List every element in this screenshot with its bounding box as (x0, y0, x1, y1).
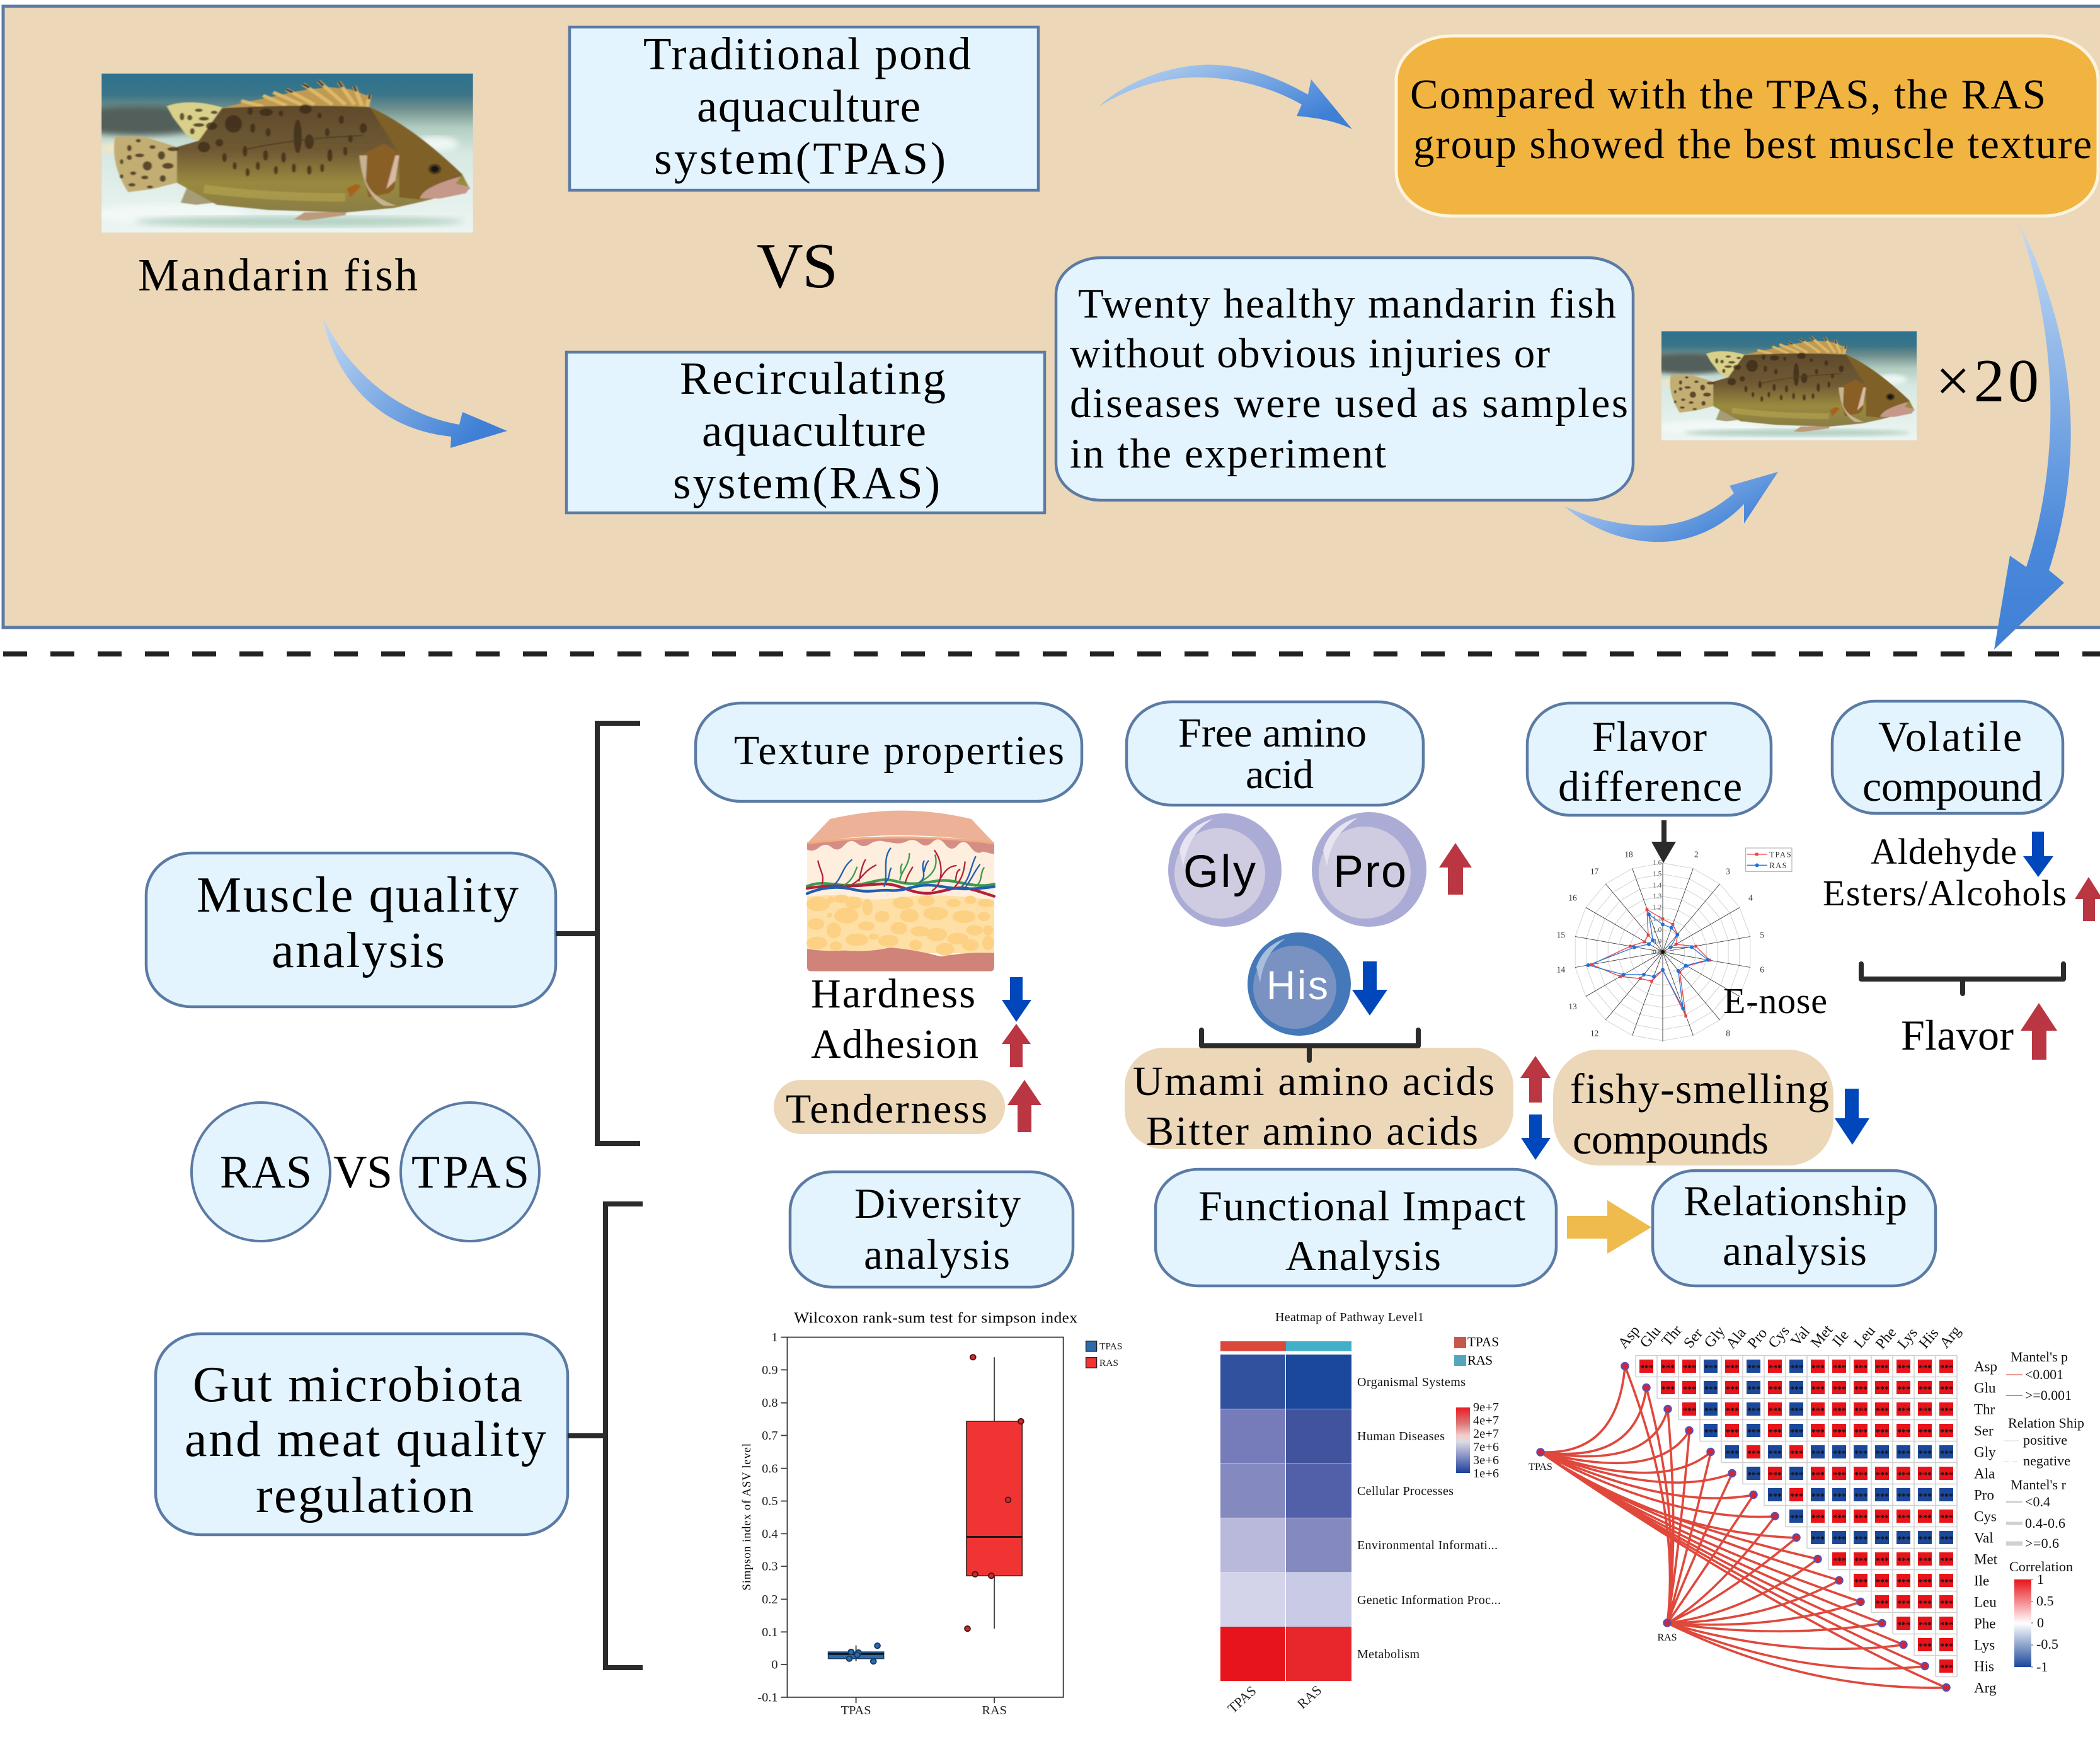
matrix: column labels: Leu (1851, 1323, 1879, 1351)
radar chart: E-nose: TPAS (1769, 851, 1791, 859)
chart: Wilcoxon box plot of simpson index: 0.1 (762, 1625, 778, 1639)
box: twenty healthy mandarin fish: in the experiment (1070, 430, 1386, 477)
box: flavor difference: difference (1558, 762, 1742, 810)
arrow: mandarin fish to RAS (323, 318, 507, 448)
chart: heatmap of pathway level 1: 7e+6 (1473, 1440, 1499, 1454)
label: times twenty: ×20 (1936, 347, 2039, 415)
matrix: column labels: Glu (1637, 1323, 1664, 1351)
matrix: significance stars: *** *** *** *** *** *** *** *** *** *** *** *** *** (1683, 1406, 1953, 1416)
matrix: significance stars: *** *** *** *** *** *** *** *** (1790, 1513, 1953, 1523)
matrix: row labels: Phe (1974, 1615, 1996, 1632)
label: RAS node: RAS (1657, 1632, 1677, 1643)
chart: heatmap of pathway level 1: Metabolism (1357, 1647, 1420, 1661)
radar chart: E-nose: 18 (1624, 849, 1633, 859)
arrow: aldehyde down (2023, 832, 2053, 877)
text: Aldehyde: Aldehyde (1871, 831, 2017, 872)
matrix: significance stars (1640, 1363, 1953, 1673)
chart: heatmap of pathway level 1: Human Diseases (1357, 1430, 1445, 1443)
text: Esters/Alcohols: Esters/Alcohols (1823, 873, 2067, 914)
matrix: column labels: His (1916, 1325, 1942, 1352)
legend: Mantel p, relationship and Mantel r (2004, 1349, 2084, 1551)
box: recirculating aquaculture system (566, 352, 1045, 513)
chart: Wilcoxon box plot of simpson index: 0.6 (762, 1462, 778, 1475)
matrix: red cells (1639, 1366, 1953, 1666)
matrix: column labels: Pro (1745, 1325, 1770, 1352)
legend: correlation colour bar: -1 (2036, 1659, 2048, 1675)
comparison: RAS VS TPAS circles (192, 1103, 539, 1241)
radar chart: E-nose: 0.9 (1653, 937, 1662, 945)
chart: heatmap of pathway level 1: Genetic Information Proc... (1357, 1593, 1501, 1607)
radar chart: E-nose: 0.8 (1653, 949, 1662, 956)
network: TPAS and RAS links (1541, 1367, 1946, 1688)
photo: mandarin fish (62, 74, 473, 232)
legend: correlation colour bar (2009, 1559, 2073, 1675)
matrix: column labels: Arg (1937, 1323, 1964, 1351)
arrow: Gly Pro up (1439, 843, 1472, 895)
matrix: row labels: Arg (1974, 1680, 1997, 1696)
sphere: His (1248, 932, 1351, 1036)
label: Mandarin fish: Mandarin fish (138, 249, 418, 301)
matrix: significance stars: *** *** *** *** *** *** *** *** *** *** *** *** *** *** (1661, 1385, 1953, 1395)
box: volatile compound (1832, 701, 2063, 813)
network: nodes (1537, 1363, 1949, 1691)
radar chart: E-nose: 13 (1568, 1002, 1577, 1011)
box: functional impact analysis (1156, 1169, 1556, 1286)
box: diversity analysis: Diversity (854, 1179, 1021, 1227)
radar chart: E-nose (1557, 848, 1792, 1041)
legend: Mantel p, relationship and Mantel r: >=0.001 (2025, 1387, 2072, 1403)
box: flavor difference (1527, 703, 1771, 815)
radar chart: E-nose: 15 (1557, 931, 1565, 940)
box: diversity analysis (790, 1172, 1073, 1287)
comparison: RAS VS TPAS circles: TPAS (411, 1147, 529, 1198)
comparison: RAS VS TPAS circles: VS (333, 1147, 393, 1198)
matrix: column labels: Thr (1659, 1322, 1685, 1349)
radar chart: E-nose: 2 (1694, 849, 1699, 859)
chart: heatmap of pathway level 1: RAS (1467, 1353, 1493, 1368)
box: functional impact analysis: Analysis (1285, 1232, 1441, 1280)
sphere: Pro (1312, 812, 1426, 927)
callout: conclusion box: Compared with the TPAS, the RAS (1410, 71, 2046, 118)
chart: heatmap of pathway level 1: RAS (1294, 1682, 1324, 1712)
chart: heatmap of pathway level 1: Organismal Systems (1357, 1375, 1466, 1389)
box: twenty healthy mandarin fish (1056, 258, 1633, 500)
chart: Wilcoxon box plot of simpson index: RAS (982, 1704, 1007, 1717)
box: texture properties (696, 703, 1082, 801)
bracket: gut microbiota branches (568, 1204, 643, 1668)
legend: correlation colour bar: 1 (2037, 1571, 2044, 1587)
legend: correlation colour bar: -0.5 (2036, 1636, 2058, 1652)
radar chart: E-nose: 12 (1590, 1028, 1598, 1038)
box: traditional pond aquaculture system: aquaculture (697, 81, 921, 132)
matrix: column labels: Lys (1895, 1325, 1921, 1352)
text: Hardness: Hardness (811, 971, 975, 1017)
radar chart: E-nose: RAS (1769, 861, 1787, 870)
matrix: row labels: Thr (1974, 1401, 1995, 1418)
radar chart: E-nose: 3 (1726, 867, 1730, 876)
legend: Mantel p, relationship and Mantel r: Mantel's r (2011, 1477, 2067, 1493)
arrow: esters up (2075, 877, 2100, 921)
box: twenty healthy mandarin fish: without obvious injuries or (1070, 330, 1550, 377)
matrix: row labels: Pro (1974, 1487, 1994, 1503)
box: traditional pond aquaculture system (570, 27, 1038, 190)
box: relationship analysis: Relationship (1684, 1177, 1907, 1225)
chart: Wilcoxon box plot of simpson index: RAS (1099, 1358, 1118, 1368)
chart: Wilcoxon box plot of simpson index: Simpson index of ASV level (740, 1443, 754, 1590)
legend: Mantel p, relationship and Mantel r: <0.001 (2025, 1367, 2063, 1382)
legend: correlation colour bar: 0 (2037, 1615, 2044, 1630)
legend: Mantel p, relationship and Mantel r: Relation Ship (2008, 1415, 2084, 1431)
box: free amino acid: Free amino (1178, 710, 1367, 756)
matrix: significance stars: *** *** *** *** *** *** *** (1811, 1535, 1953, 1545)
chart: heatmap of pathway level 1: 4e+7 (1473, 1414, 1499, 1428)
panel: top study design background (3, 6, 2100, 627)
pill: umami and bitter amino acids (1125, 1048, 1513, 1154)
matrix: column labels: Asp (1615, 1322, 1643, 1352)
box: texture properties: Texture properties (734, 728, 1064, 774)
chart: Wilcoxon box plot of simpson index: 0.3 (762, 1560, 778, 1574)
divider: dashed line (3, 651, 2100, 656)
bracket: flavor (1861, 964, 2063, 994)
matrix: column labels: Ile (1830, 1327, 1852, 1350)
callout: conclusion box: group showed the best muscle texture (1413, 121, 2092, 168)
chart: heatmap of pathway level 1: 1e+6 (1473, 1467, 1499, 1481)
box: gut microbiota and meat quality regulation (156, 1334, 568, 1535)
box: twenty healthy mandarin fish: Twenty healthy mandarin fish (1078, 280, 1616, 327)
box: relationship analysis: analysis (1723, 1227, 1867, 1275)
chart: Mantel correlation matrix (1529, 1322, 2084, 1696)
chart: heatmap of pathway level 1: 9e+7 (1473, 1401, 1499, 1414)
legend: correlation colour bar: 0.5 (2036, 1593, 2054, 1609)
callout: conclusion box (1396, 36, 2098, 216)
legend: Mantel p, relationship and Mantel r: Mantel's p (2011, 1349, 2068, 1365)
chart: Wilcoxon box plot of simpson index: 0.7 (762, 1429, 778, 1443)
matrix: significance stars: *** *** *** *** *** *** *** *** *** *** *** (1726, 1449, 1953, 1459)
comparison: RAS VS TPAS circles: RAS (220, 1147, 312, 1198)
radar chart: E-nose: 6 (1760, 965, 1764, 974)
chart: heatmap of pathway level 1: Heatmap of Pathway Level1 (1275, 1310, 1424, 1324)
matrix: column labels: Phe (1873, 1324, 1900, 1353)
chart: Wilcoxon box plot of simpson index: 0.2 (762, 1593, 778, 1607)
radar chart: E-nose: 1.2 (1653, 904, 1662, 912)
chart: heatmap of pathway level 1: 2e+7 (1473, 1427, 1499, 1441)
sphere: Pro: Pro (1333, 847, 1406, 897)
matrix: grid cells (1636, 1356, 1957, 1677)
arrow: TPAS to conclusion (1099, 65, 1352, 129)
radar chart: E-nose: 5 (1760, 931, 1764, 940)
legend: correlation colour bar: Correlation (2009, 1559, 2073, 1574)
matrix: significance stars: *** *** *** *** (1876, 1599, 1953, 1609)
box: gut microbiota and meat quality regulation: and meat quality (185, 1412, 546, 1467)
arrow: big curved arrow down to analysis (1994, 224, 2071, 650)
box: volatile compound: compound (1862, 762, 2043, 810)
arrow: fishy compounds down (1835, 1089, 1869, 1145)
pill: fishy-smelling compounds: compounds (1573, 1115, 1769, 1163)
matrix: significance stars: *** *** *** *** *** *** *** *** *** *** (1747, 1470, 1953, 1481)
box: free amino acid (1127, 702, 1423, 805)
matrix: significance stars: *** (1940, 1663, 1953, 1673)
text: E-nose: E-nose (1723, 980, 1827, 1021)
heading: VS: VS (757, 231, 838, 302)
box: free amino acid: acid (1246, 752, 1314, 798)
box: diversity analysis: analysis (864, 1230, 1010, 1278)
matrix: significance stars: *** *** *** *** *** *** (1833, 1556, 1953, 1566)
radar chart: E-nose: 17 (1590, 867, 1599, 876)
illustration: skin and muscle tissue cross-section (806, 811, 994, 971)
matrix: row labels: Gly (1974, 1444, 1996, 1460)
box: muscle quality analysis: Muscle quality (197, 868, 519, 923)
box: flavor difference: Flavor (1592, 713, 1707, 760)
matrix: row labels: Ile (1974, 1573, 1989, 1589)
radar chart: E-nose: 1.4 (1653, 881, 1662, 889)
matrix: row labels: Met (1974, 1551, 1998, 1567)
radar chart: E-nose: 1.0 (1653, 926, 1662, 934)
radar chart: E-nose: 1.3 (1653, 893, 1662, 900)
legend: Mantel p, relationship and Mantel r: negative (2023, 1453, 2070, 1469)
pill: fishy-smelling compounds (1553, 1050, 1833, 1166)
box: gut microbiota and meat quality regulation: regulation (256, 1468, 474, 1523)
pill: umami and bitter amino acids: Bitter amino acids (1146, 1108, 1478, 1154)
matrix: row labels: Lys (1974, 1637, 1995, 1653)
arrow: His down (1352, 961, 1387, 1016)
arrow: samples to fish (1564, 472, 1778, 542)
box: recirculating aquaculture system: system(RAS) (673, 457, 940, 508)
arrow: bitter down (1521, 1114, 1551, 1160)
box: recirculating aquaculture system: aquaculture (702, 405, 926, 456)
radar chart: E-nose: 1.5 (1653, 871, 1662, 878)
matrix: significance stars: *** *** *** *** *** *** *** *** *** (1769, 1492, 1953, 1502)
matrix: column labels: Ala (1723, 1325, 1750, 1352)
matrix: row labels (1974, 1358, 1998, 1696)
radar chart: E-nose: 1.1 (1653, 915, 1661, 923)
matrix: blue cells (1704, 1366, 1953, 1537)
arrow: black flavor difference (1651, 820, 1676, 863)
matrix: significance stars: *** *** (1919, 1642, 1953, 1652)
matrix: column labels: Met (1808, 1322, 1836, 1351)
box: recirculating aquaculture system: Recirculating (680, 353, 946, 404)
chart: heatmap of pathway level 1 (1220, 1310, 1501, 1716)
box: muscle quality analysis: analysis (272, 923, 445, 978)
photo: sample fish (1634, 331, 1917, 440)
pill: umami and bitter amino acids: Umami amino acids (1133, 1058, 1495, 1104)
chart: Wilcoxon box plot of simpson index (740, 1310, 1122, 1717)
sphere: His: His (1266, 963, 1328, 1008)
legend: Mantel p, relationship and Mantel r: >=0.6 (2025, 1535, 2059, 1551)
arrow: umami up (1520, 1056, 1551, 1103)
chart: Wilcoxon box plot of simpson index: Wilcoxon rank-sum test for simpson index (794, 1310, 1078, 1327)
text: Flavor: Flavor (1901, 1011, 2014, 1059)
box: functional impact analysis: Functional Impact (1198, 1182, 1525, 1230)
matrix: row labels: His (1974, 1658, 1994, 1675)
chart: Wilcoxon box plot of simpson index: 0.5 (762, 1494, 778, 1508)
arrow: functional to relationship (1567, 1200, 1651, 1254)
box: gut microbiota and meat quality regulation: Gut microbiota (193, 1357, 522, 1412)
matrix: significance stars: *** *** *** *** *** *** *** *** *** *** *** *** *** *** *** (1640, 1363, 1953, 1373)
matrix: row labels: Cys (1974, 1508, 1997, 1525)
pill: fishy-smelling compounds: fishy-smelling (1570, 1065, 1829, 1113)
matrix: column labels: Gly (1701, 1323, 1728, 1351)
matrix: row labels: Leu (1974, 1594, 1997, 1610)
box: muscle quality analysis (146, 853, 556, 1007)
pill: Tenderness: Tenderness (786, 1086, 987, 1132)
matrix: row labels: Ala (1974, 1465, 1995, 1482)
chart: Wilcoxon box plot of simpson index: TPAS (1099, 1341, 1122, 1352)
arrow: adhesion up (1002, 1024, 1031, 1067)
matrix: row labels: Glu (1974, 1380, 1996, 1396)
chart: heatmap of pathway level 1: Cellular Processes (1357, 1484, 1454, 1498)
chart: heatmap of pathway level 1: TPAS (1467, 1334, 1499, 1349)
sphere: Gly: Gly (1183, 847, 1256, 897)
chart: heatmap of pathway level 1: Environmental Informati... (1357, 1538, 1498, 1552)
arrow: flavor up (2021, 1003, 2057, 1060)
chart: Wilcoxon box plot of simpson index: 0.4 (762, 1527, 778, 1541)
label: TPAS node: TPAS (1529, 1462, 1552, 1472)
matrix: significance stars: *** *** *** (1897, 1620, 1953, 1630)
chart: Wilcoxon box plot of simpson index: -0.1 (757, 1691, 778, 1704)
matrix: column labels: Cys (1765, 1323, 1793, 1351)
chart: heatmap of pathway level 1: TPAS (1224, 1683, 1259, 1716)
matrix: significance stars: *** *** *** *** *** (1854, 1578, 1953, 1588)
bracket: amino acids (1202, 1030, 1418, 1060)
matrix: row labels: Asp (1974, 1358, 1997, 1375)
chart: Wilcoxon box plot of simpson index: 0.8 (762, 1397, 778, 1410)
chart: Wilcoxon box plot of simpson index: 0 (771, 1658, 778, 1672)
box: traditional pond aquaculture system: system(TPAS) (654, 133, 946, 184)
legend: Mantel p, relationship and Mantel r: 0.4-0.6 (2025, 1515, 2065, 1531)
arrow: hardness down (1002, 977, 1031, 1022)
radar chart: E-nose: 16 (1568, 893, 1577, 902)
arrow: tenderness up (1007, 1080, 1041, 1132)
radar chart: E-nose: 4 (1748, 893, 1753, 902)
radar chart: E-nose: 14 (1557, 965, 1565, 974)
box: volatile compound: Volatile (1878, 713, 2022, 760)
matrix: row labels: Ser (1974, 1423, 1994, 1439)
text: Adhesion: Adhesion (811, 1021, 978, 1067)
radar chart: E-nose: 1.6 (1653, 859, 1662, 867)
legend: Mantel p, relationship and Mantel r: positive (2023, 1432, 2067, 1448)
matrix: column labels (1615, 1322, 1964, 1353)
matrix: row labels: Val (1974, 1530, 1994, 1546)
chart: Wilcoxon box plot of simpson index: 0.9 (762, 1363, 778, 1377)
radar chart: E-nose: 8 (1726, 1028, 1730, 1038)
chart: Wilcoxon box plot of simpson index: 1 (771, 1331, 778, 1344)
chart: Wilcoxon box plot of simpson index: TPAS (841, 1704, 871, 1717)
box: traditional pond aquaculture system: Traditional pond (643, 28, 971, 79)
chart: heatmap of pathway level 1: 3e+6 (1473, 1453, 1499, 1467)
matrix: significance stars: *** *** *** *** *** *** *** *** *** *** *** *** (1704, 1428, 1953, 1438)
box: twenty healthy mandarin fish: diseases were used as samples (1070, 380, 1628, 427)
matrix: column labels: Ser (1680, 1326, 1706, 1351)
sphere: Gly (1168, 813, 1282, 927)
matrix: column labels: Val (1787, 1324, 1813, 1349)
bracket: muscle quality branches (556, 723, 640, 1143)
legend: Mantel p, relationship and Mantel r: <0.4 (2025, 1494, 2050, 1510)
radar chart: E-nose: 7 (1748, 1002, 1753, 1012)
box: relationship analysis (1653, 1171, 1936, 1286)
